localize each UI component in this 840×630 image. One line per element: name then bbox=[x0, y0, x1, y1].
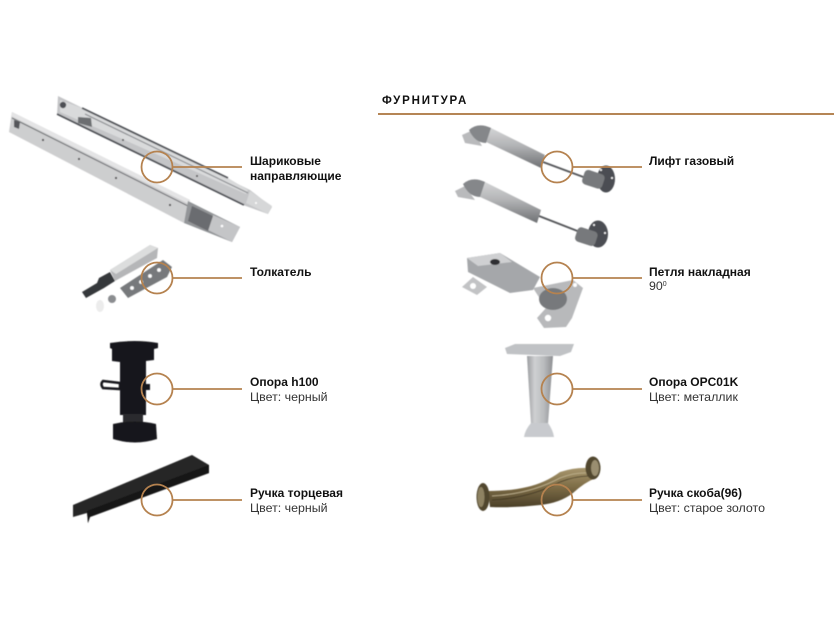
callout: metallic support marker bbox=[542, 374, 642, 404]
callout: bow handle marker bbox=[542, 484, 642, 516]
item: pusher bbox=[82, 245, 311, 312]
item: overlay hinge bbox=[462, 253, 751, 328]
item: end handle bbox=[73, 455, 343, 523]
label: hinge: Петля накладная bbox=[649, 265, 751, 279]
photo: overlay hinge bbox=[462, 253, 583, 328]
callout: support h100 marker bbox=[142, 374, 242, 404]
label: end handle: Цвет: черный bbox=[250, 501, 328, 515]
label: bow handle: Ручка скоба(96) bbox=[649, 486, 742, 500]
title rule bbox=[378, 113, 834, 115]
label: pusher: Толкатель bbox=[250, 265, 311, 279]
item: bow handle bbox=[476, 456, 765, 516]
photo: end handle bbox=[73, 455, 209, 523]
label: end handle: Ручка торцевая bbox=[250, 486, 343, 500]
label: bow handle: Цвет: старое золото bbox=[649, 501, 765, 515]
label: gas lift: Лифт газовый bbox=[649, 154, 734, 168]
photo: bow handle bbox=[476, 456, 600, 511]
label: support h100: Цвет: черный bbox=[250, 390, 328, 404]
item: support OPC01K bbox=[505, 344, 739, 437]
title: ФУРНИТУРА bbox=[382, 95, 468, 107]
photo: pusher bbox=[82, 245, 172, 312]
label: metallic support: Цвет: металлик bbox=[649, 390, 738, 404]
item: ball-bearing slides bbox=[9, 96, 342, 242]
label: metallic support: Опора OPC01K bbox=[649, 375, 738, 389]
callout: pusher marker bbox=[142, 262, 242, 294]
photo: support h100 bbox=[102, 341, 158, 442]
photo: ball-bearing slides bbox=[9, 96, 272, 242]
callout: ball-bearing slides marker bbox=[142, 152, 242, 182]
callout: gas lift marker bbox=[542, 152, 642, 182]
photo: gas lifts bbox=[455, 125, 615, 248]
label: support h100: Опора h100 bbox=[250, 375, 319, 389]
callout: end handle marker bbox=[142, 484, 242, 516]
photo: metallic support bbox=[505, 344, 574, 437]
label: ball-bearing slides: Шариковые bbox=[250, 154, 321, 168]
label: hinge: 90 bbox=[649, 279, 663, 293]
item: support h100 bbox=[102, 341, 328, 442]
label: hinge: 0 bbox=[663, 281, 667, 288]
callout: hinge marker bbox=[542, 262, 642, 294]
item: gas lift bbox=[455, 125, 734, 248]
label: ball-bearing slides: направляющие bbox=[250, 169, 342, 183]
